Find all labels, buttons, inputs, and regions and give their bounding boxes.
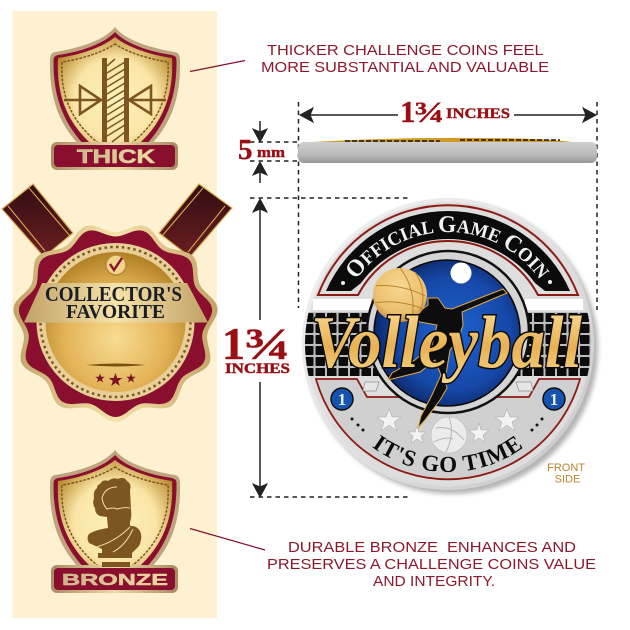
height dimension: [222, 199, 290, 497]
width label: ¾: [414, 96, 444, 129]
thickness label: mm: [257, 145, 286, 161]
coin rim: [302, 198, 594, 490]
ribbons: [2, 184, 232, 257]
icon: classical bust: [88, 478, 141, 567]
lower silver field: [316, 379, 580, 479]
three stars: [95, 373, 136, 386]
cream background panel: [12, 11, 217, 618]
script word: volleyball: Volleyball: [311, 302, 582, 384]
shadow line: [86, 364, 146, 366]
note: front side: FRONT: [547, 462, 585, 474]
width label: 1: [400, 94, 416, 129]
badge: thick: [50, 27, 180, 170]
arrows: [253, 121, 267, 183]
heading: collector's favorite: COLLECTOR'S: [45, 282, 182, 306]
leader line to bronze caption: [190, 528, 265, 550]
check mark seal: [106, 255, 126, 275]
small silver ball: [431, 417, 467, 453]
caption: bronze: DURABLE BRONZE ENHANCES AND: [288, 539, 576, 556]
side view coin: [298, 138, 597, 163]
dimension guides: [250, 102, 597, 497]
net band: [303, 312, 593, 376]
height label: ¾: [244, 320, 290, 369]
silver stars: [377, 409, 519, 443]
coin front: [302, 198, 601, 496]
height label: 1: [222, 318, 245, 369]
label: bronze: BRONZE: [62, 572, 169, 589]
banner: [24, 283, 208, 322]
arched text: OFFICIAL GAME COIN: [347, 216, 550, 278]
leader line to thick caption: [190, 60, 245, 72]
thickness dimension: [238, 121, 286, 183]
thickness label: 5: [238, 134, 252, 166]
note: front side: SIDE: [555, 474, 580, 486]
caption: thickness: MORE SUBSTANTIAL AND VALUABLE: [261, 59, 549, 76]
player silhouette: [388, 289, 507, 428]
arched text: it's go time: IT'S GO TIME: [372, 434, 522, 472]
number badges: 1: [550, 390, 558, 409]
medal body: [13, 226, 218, 422]
upper arch: [318, 205, 578, 295]
width dimension: [300, 94, 596, 129]
badge: bronze: [50, 450, 180, 593]
label: thick: THICK: [77, 147, 155, 168]
coin shadow: [306, 202, 598, 494]
caption: bronze: PRESERVES A CHALLENGE COINS VALUE: [267, 556, 596, 573]
silver plates: [363, 382, 533, 391]
dots: [350, 418, 544, 432]
central blue disc: [367, 251, 529, 413]
badge: collector's favorite medal: [2, 184, 232, 422]
width label: INCHES: [446, 106, 510, 122]
number badges: 1: [338, 390, 346, 409]
volleyball: [373, 268, 427, 322]
caption: thickness: THICKER CHALLENGE COINS FEEL: [267, 42, 543, 59]
arrow: [253, 199, 267, 497]
height label: INCHES: [225, 361, 290, 377]
caption: bronze: AND INTEGRITY.: [373, 573, 495, 590]
icon: thickness measure: [64, 58, 166, 142]
number badges: [331, 388, 565, 410]
white stripes: [313, 299, 583, 310]
arrow: [300, 108, 596, 122]
heading: collector's favorite: FAVORITE: [66, 301, 165, 323]
